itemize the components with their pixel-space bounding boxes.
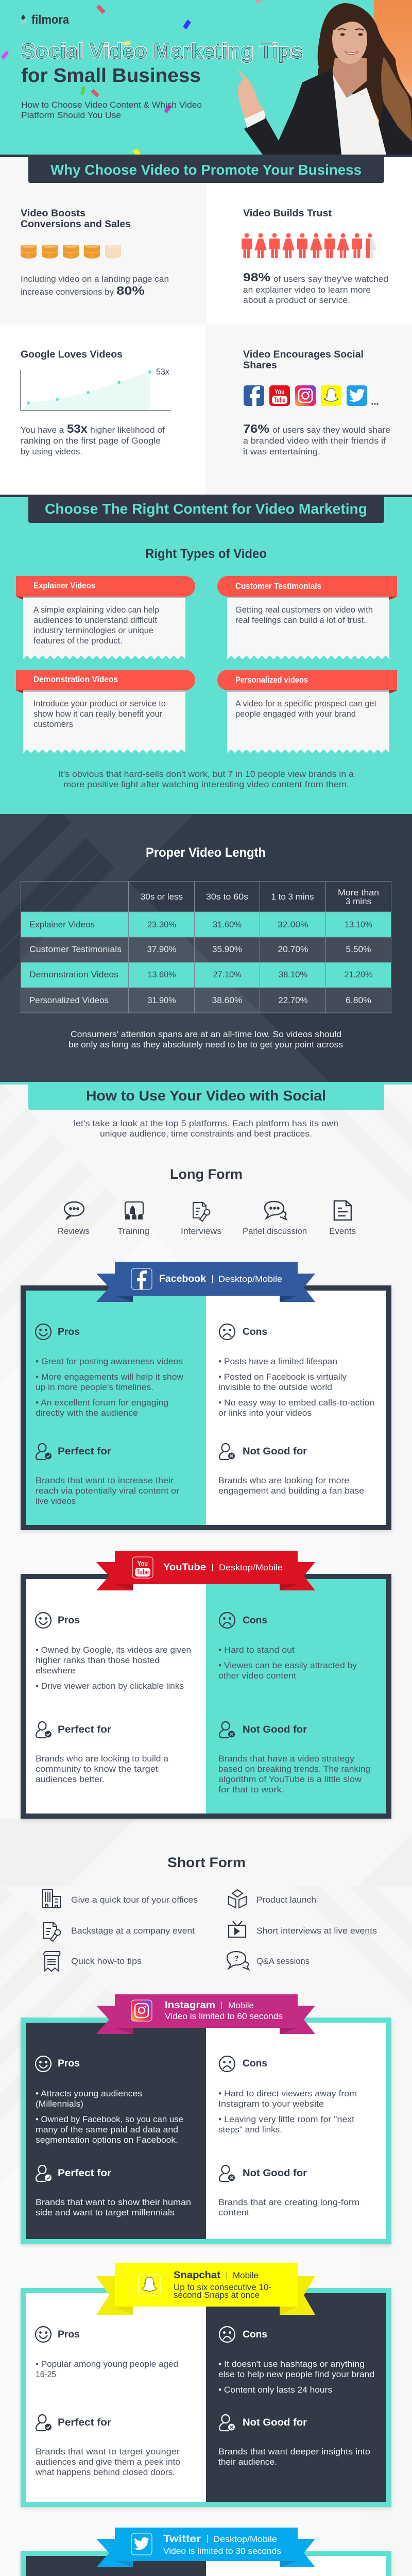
text block	[243, 270, 388, 305]
icon labels: Events	[329, 1227, 356, 1236]
text block: attention spans: be only as long as they absolutely need to be to get your point across	[68, 1040, 343, 1049]
row: demonstration videos: Demonstration Videos	[29, 970, 118, 979]
section background: choose content	[0, 495, 412, 814]
ribbon: twitter: Desktop/Mobile	[213, 2534, 277, 2544]
heading: proper video length: Proper Video Length	[146, 845, 266, 860]
perfect for	[36, 1444, 180, 1506]
icon: training	[125, 1202, 143, 1219]
text block: hard-sells note: more positive light after watching interesting video content from them.	[63, 780, 349, 789]
not good for: Brands that have a video strategy	[218, 1754, 355, 1764]
not good for: Brands that are creating long-form	[218, 2198, 359, 2207]
text block: by using videos.	[21, 447, 82, 456]
ribbon: facebook: Desktop/Mobile	[218, 1274, 282, 1284]
cons	[218, 1324, 374, 1418]
list labels: Product launch	[256, 1895, 316, 1905]
card: explainer videos: audiences to understand difficult	[33, 616, 157, 625]
pros: • Drive viewer action by clickable links	[36, 1682, 184, 1691]
row: demonstration videos: 13.60%	[147, 970, 176, 979]
icon labels: Reviews	[58, 1227, 90, 1236]
icon: instagram	[295, 385, 316, 406]
confetti	[1, 0, 262, 155]
text block: 53x	[67, 422, 88, 435]
cons: steps" and links.	[218, 2125, 282, 2134]
heading: short form: Short Form	[167, 1855, 246, 1870]
icon: people pictogram	[242, 233, 376, 258]
heading: right types of video: Right Types of Video	[145, 547, 267, 561]
card: demonstration videos: Demonstration Videos	[33, 674, 118, 684]
pros: • Attracts young audiences	[36, 2089, 142, 2098]
card: explainer videos: Explainer Videos	[33, 581, 95, 590]
perfect for: reach via potentially viral content or	[36, 1486, 180, 1496]
frame	[21, 2551, 391, 2576]
text block: of users say they would share	[272, 426, 390, 435]
ribbon: snapchat	[96, 2263, 315, 2315]
icon: youtube: Tube	[274, 396, 285, 404]
icon labels	[58, 1227, 356, 1236]
frame	[21, 1574, 391, 1819]
cons: Cons	[243, 2058, 267, 2069]
ribbon: youtube: You	[138, 1560, 148, 1568]
list labels: Short interviews at live events	[256, 1926, 377, 1936]
panel: youtube	[21, 1551, 391, 1819]
icon: q&a	[227, 1952, 249, 1970]
perfect for: live videos	[36, 1497, 76, 1506]
page background: light pattern	[0, 1084, 412, 2576]
icon: youtube	[269, 385, 290, 406]
perfect for: community to know the target	[36, 1765, 158, 1774]
icon: coins	[21, 241, 121, 259]
pros: • Owned by Facebook, so you can use	[36, 2115, 183, 2124]
pros: • More engagements will help it show	[36, 1372, 183, 1382]
card: personalized videos: A video for a specific prospect can get	[235, 699, 376, 708]
cons: • Posted on Facebook is virtually	[218, 1372, 347, 1382]
row: customer testimonials: 35.90%	[212, 945, 242, 954]
ribbon: twitter: Twitter	[163, 2534, 201, 2545]
panel: snapchat	[21, 2263, 391, 2507]
list: short form types	[43, 1890, 377, 1971]
text block: top 5 platforms	[74, 1119, 338, 1139]
icon: facebook	[244, 385, 264, 406]
cons: else to help new people find your brand	[218, 2370, 374, 2379]
table header: 3 mins	[346, 897, 371, 906]
heading: Video Encourages Social	[243, 349, 364, 360]
perfect for: side and want to target millennials	[36, 2208, 175, 2217]
cons: • Posts have a limited lifespan	[218, 1357, 337, 1366]
not good for	[218, 2415, 370, 2467]
not good for: content	[218, 2208, 249, 2217]
pros	[36, 2056, 183, 2145]
text block: Including video on a landing page can	[21, 275, 169, 284]
text block: higher likelihood of	[90, 426, 165, 435]
icon: q&a: ?	[234, 1954, 239, 1963]
not good for: Brands who are looking for more	[218, 1476, 349, 1485]
list labels: Backstage at a company event	[71, 1926, 195, 1936]
row: explainer videos: 23.30%	[147, 920, 176, 929]
panel: social shares	[243, 349, 390, 456]
table header: 30s to 60s	[206, 892, 248, 902]
text block: of users say they've watched	[273, 275, 388, 284]
card: customer testimonials: real feelings can build a lot of trust.	[235, 616, 366, 625]
frame	[21, 1285, 391, 1530]
ribbon: facebook	[96, 1262, 315, 1302]
pros: segmentation options on Facebook.	[36, 2136, 178, 2145]
pros: Pros	[58, 1615, 80, 1626]
pros: Pros	[58, 1327, 80, 1337]
icon: snapchat	[321, 385, 341, 406]
heading: Shares	[243, 360, 277, 371]
row: explainer videos: Explainer Videos	[29, 920, 95, 929]
pros: elsewhere	[36, 1666, 75, 1675]
row: customer testimonials: Customer Testimonials	[29, 945, 122, 954]
perfect for: what happens behind closed doors.	[35, 2468, 175, 2477]
text block: a branded video with their friends if	[243, 436, 386, 446]
card: explainer videos	[16, 576, 195, 659]
ribbon: instagram: Mobile	[228, 2001, 254, 2010]
cons: invisible to the outside world	[218, 1383, 332, 1392]
pros: 16-25	[36, 2370, 56, 2379]
cons: Cons	[243, 1615, 267, 1626]
row: personalized videos: 6.80%	[346, 996, 371, 1005]
heading: Google Loves Videos	[21, 349, 123, 360]
icon: panel discussion	[265, 1201, 286, 1219]
icon: events	[334, 1201, 351, 1220]
pros: Pros	[58, 2329, 80, 2340]
perfect for: Perfect for	[58, 2168, 112, 2179]
list labels: Q&A sessions	[256, 1957, 310, 1966]
title: Social Video Marketing Tips	[21, 39, 303, 63]
row: demonstration videos: 21.20%	[344, 970, 373, 979]
card: demonstration videos: show how it can really benefit your	[33, 709, 162, 719]
pros	[36, 2327, 178, 2379]
card: personalized videos: people engaged with your brand	[235, 709, 356, 719]
ribbon: snapchat: Mobile	[233, 2270, 259, 2280]
not good for: algorithm of YouTube is a little slow	[218, 1775, 362, 1784]
perfect for: audiences better.	[36, 1775, 105, 1784]
panel: conversions and sales	[21, 208, 169, 297]
text block: an explainer video to learn more	[243, 285, 371, 295]
ribbon: instagram: Video is limited to 60 seconds	[165, 2011, 283, 2021]
ribbon: twitter	[96, 2528, 315, 2567]
perfect for	[35, 2415, 180, 2477]
perfect for: Brands that want to show their human	[36, 2198, 191, 2207]
ribbon: youtube: Tube	[136, 1568, 149, 1576]
list labels	[71, 1895, 377, 1966]
perfect for: Perfect for	[58, 1724, 112, 1735]
table header	[141, 888, 379, 906]
text block: attention spans	[68, 1030, 343, 1049]
ribbon: youtube: Desktop/Mobile	[219, 1563, 283, 1572]
perfect for	[36, 1722, 169, 1784]
icon: live tv	[229, 1921, 246, 1937]
row: personalized videos: 38.60%	[212, 996, 243, 1005]
not good for	[218, 1722, 370, 1794]
row: explainer videos: 31.60%	[213, 920, 242, 929]
card: personalized videos	[217, 670, 397, 753]
cons: • It doesn't use hashtags or anything	[218, 2360, 365, 2369]
section banner: why choose video: Why Choose Video to Promote Your Business	[50, 162, 362, 178]
text block: ranking on the first page of Google	[21, 436, 161, 446]
card: demonstration videos: Introduce your product or service to	[33, 699, 166, 708]
icon labels: Panel discussion	[243, 1227, 307, 1236]
icon row: long form types	[58, 1201, 356, 1236]
section banner: why choose video	[0, 155, 412, 183]
pros: • Great for posting awareness videos	[36, 1357, 183, 1366]
heading: long form: Long Form	[170, 1166, 243, 1182]
icon: interviews	[193, 1202, 210, 1221]
not good for: engagement and building a fan base	[218, 1486, 364, 1496]
perfect for: Perfect for	[58, 2417, 112, 2428]
list labels: Give a quick tour of your offices	[71, 1895, 198, 1905]
perfect for: Brands that want to increase their	[36, 1476, 174, 1485]
heading	[243, 349, 364, 371]
ribbon: snapchat: Up to six consecutive 10-	[174, 2282, 271, 2292]
area chart: 53x	[21, 367, 171, 411]
ribbon: instagram	[96, 1994, 315, 2034]
text block: hard-sells note	[58, 770, 354, 789]
text block: about a product or service.	[243, 296, 350, 305]
row: personalized videos: 31.90%	[147, 996, 176, 1005]
pros: • An excellent forum for engaging	[36, 1398, 168, 1408]
row: explainer videos	[29, 920, 372, 929]
not good for: Not Good for	[243, 1724, 307, 1735]
icon: how-to tips	[44, 1952, 60, 1971]
pros	[36, 1613, 191, 1691]
panel: facebook	[21, 1262, 391, 1530]
heading	[21, 208, 131, 230]
panel: why choose video backgrounds	[0, 155, 412, 495]
title	[21, 39, 303, 87]
subtitle	[21, 100, 202, 120]
section banner: choose the right content	[0, 495, 412, 523]
logo: filmora: filmora	[31, 13, 70, 27]
row: explainer videos: 13.10%	[345, 920, 372, 929]
text block: hard-sells note: It's obvious that hard-sells don't work, but 7 in 10 people view brands in a	[58, 770, 354, 779]
section banner: how to use your video with social: How to Use Your Video with Social	[86, 1088, 326, 1104]
row: customer testimonials	[29, 945, 371, 954]
not good for: for that to work.	[218, 1785, 284, 1794]
row: demonstration videos: 38.10%	[279, 970, 307, 979]
cons: Cons	[243, 1327, 267, 1337]
subtitle: Platform Should You Use	[21, 110, 121, 120]
ribbon: youtube: YouTube	[163, 1562, 206, 1573]
section banner: choose the right content: Choose The Right Content for Video Marketing	[45, 501, 367, 517]
pros: (Millennials)	[36, 2099, 83, 2109]
icon: reviews	[64, 1202, 84, 1219]
row: demonstration videos: 27.10%	[213, 970, 242, 979]
not good for	[218, 1444, 364, 1496]
row: personalized videos: Personalized Videos	[29, 996, 109, 1005]
text block: increase conversions by	[21, 287, 114, 297]
card: customer testimonials: Getting real customers on video with	[235, 605, 373, 615]
text block: 80%	[116, 284, 145, 297]
section banner: how to use your video with social	[0, 1082, 412, 1110]
text block: it was entertaining.	[243, 447, 320, 456]
icon: youtube: You	[275, 387, 284, 396]
pros	[36, 1324, 183, 1418]
cons: Instagram to your website	[218, 2099, 324, 2109]
pros: higher ranks than those hosted	[36, 1656, 160, 1665]
perfect for: audiences and give them a peek into	[36, 2458, 180, 2467]
ribbon: twitter: Video is limited to 30 seconds	[163, 2546, 281, 2556]
ribbon: youtube	[96, 1551, 315, 1590]
panel: builds trust	[242, 208, 388, 305]
pros: up in more people's timelines.	[36, 1383, 153, 1392]
card: personalized videos: Personalized videos	[235, 675, 308, 685]
text block: attention spans: Consumers' attention spans are at an all-time low. So videos should	[71, 1030, 341, 1039]
not good for: based on breaking trends. The ranking	[218, 1765, 370, 1774]
panel: instagram	[21, 1994, 391, 2244]
row: personalized videos: 22.70%	[278, 996, 308, 1005]
pros: • Popular among young people aged	[36, 2360, 178, 2369]
cons: other video content	[218, 1671, 296, 1681]
ribbon: instagram: Instagram	[165, 2000, 215, 2011]
table header: 1 to 3 mins	[271, 892, 314, 902]
cons: • Viewes can be easily attracted by	[218, 1661, 357, 1670]
heading: Video Boosts	[21, 208, 85, 219]
illustration: businesswoman pointing	[236, 3, 412, 155]
card: customer testimonials	[217, 576, 397, 659]
area chart: 53x: 53x	[156, 367, 170, 377]
table header: More than	[338, 888, 379, 897]
cons: • Hard to direct viewers away from	[218, 2089, 357, 2098]
pros: • Owned by Google, its videos are given	[36, 1646, 191, 1655]
row: explainer videos: 32.00%	[278, 920, 308, 929]
card: customer testimonials: Customer Testimonials	[235, 581, 321, 591]
ribbon: snapchat: Snapchat	[174, 2270, 221, 2281]
pros: directly with the audience	[36, 1409, 138, 1418]
text block: top 5 platforms: let's take a look at the top 5 platforms. Each platform has its own	[74, 1119, 338, 1128]
icon: backstage	[44, 1923, 61, 1941]
card: explainer videos: industry terminologies or unique	[33, 626, 153, 635]
perfect for: Perfect for	[58, 1446, 112, 1457]
text block	[21, 275, 169, 297]
card: demonstration videos	[16, 670, 195, 753]
cons	[218, 2327, 374, 2395]
text block: You have a	[21, 426, 64, 435]
text block: 76%	[243, 422, 269, 435]
not good for: Not Good for	[243, 2168, 307, 2179]
row: customer testimonials: 37.90%	[147, 945, 177, 954]
cons: Cons	[243, 2329, 267, 2340]
card: explainer videos: A simple explaining video can help	[33, 605, 159, 615]
cons: • Content only lasts 24 hours	[218, 2385, 332, 2395]
ribbon: snapchat: second Snaps at once	[174, 2290, 260, 2300]
panel: twitter	[21, 2528, 391, 2576]
heading: Video Builds Trust	[243, 208, 332, 219]
pros: many of the same paid ad data and	[36, 2125, 178, 2134]
row: customer testimonials: 5.50%	[346, 945, 371, 954]
text block: top 5 platforms: unique audience, time constraints and best practices.	[100, 1129, 312, 1139]
card: explainer videos: features of the product.	[33, 636, 123, 646]
not good for: Not Good for	[243, 2417, 307, 2428]
icon: product launch	[229, 1890, 246, 1908]
panel: google loves videos	[21, 349, 171, 456]
row: personalized videos	[29, 996, 371, 1005]
panel: hero	[0, 0, 412, 155]
row: demonstration videos	[29, 970, 373, 979]
card: demonstration videos: customers	[33, 720, 73, 729]
cons: • Hard to stand out	[218, 1646, 295, 1655]
subtitle: How to Choose Video Content & Which Video	[21, 100, 202, 110]
icon: twitter	[347, 385, 367, 406]
perfect for	[36, 2165, 191, 2217]
not good for	[218, 2165, 359, 2217]
frame	[21, 2288, 391, 2507]
frame	[21, 2018, 391, 2244]
cons: • Leaving very little room for "next	[218, 2115, 354, 2124]
table: video length shares	[21, 881, 391, 1013]
section background: proper video length	[0, 814, 412, 1082]
icon labels: Interviews	[181, 1227, 221, 1236]
cons	[218, 2056, 357, 2134]
heading: Conversions and Sales	[21, 219, 131, 230]
cons: • No easy way to embed calls-to-action	[218, 1398, 374, 1408]
not good for: Brands that want deeper insights into	[218, 2447, 370, 2456]
not good for: Not Good for	[243, 1446, 307, 1457]
table header: 30s or less	[141, 892, 183, 902]
cons	[218, 1613, 357, 1681]
text block: 98%	[243, 270, 270, 284]
not good for: their audience.	[218, 2458, 277, 2467]
row: customer testimonials: 20.70%	[278, 945, 308, 954]
icon: more dots	[371, 403, 379, 405]
text block	[21, 422, 165, 456]
icon: offices	[43, 1890, 60, 1908]
perfect for: Brands who are looking to build a	[36, 1754, 169, 1764]
list labels: Quick how-to tips	[71, 1957, 142, 1966]
pros: Pros	[58, 2058, 80, 2069]
icon labels: Training	[117, 1227, 149, 1236]
ribbon: facebook: Facebook	[159, 1274, 206, 1284]
perfect for: Brands that want to target younger	[36, 2447, 180, 2456]
text block	[243, 422, 390, 456]
title: for Small Business	[21, 65, 201, 87]
cons: or links into your videos	[218, 1409, 312, 1418]
